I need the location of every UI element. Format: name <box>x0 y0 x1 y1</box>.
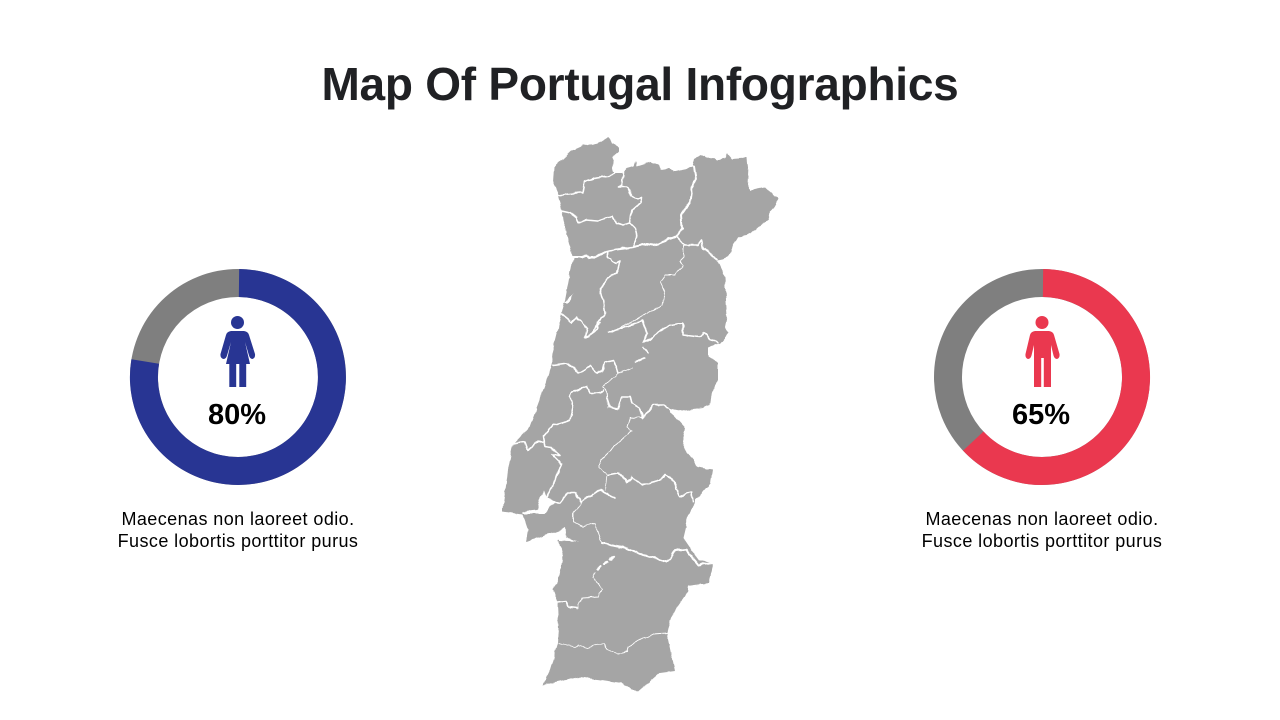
value: 80%: 80% <box>208 399 266 431</box>
title: Map Of Portugal Infographics <box>321 58 959 110</box>
estuary and coastal inlets <box>523 293 578 542</box>
caption right: Fusce lobortis porttitor purus <box>922 531 1162 551</box>
icon: woman <box>220 316 255 387</box>
icon: man <box>1025 316 1060 387</box>
donut chart: 80% <box>144 283 332 471</box>
map of Portugal <box>503 137 778 692</box>
value: 65%: 65% <box>1012 399 1070 431</box>
caption left: Fusce lobortis porttitor purus <box>118 531 358 551</box>
caption right: Maecenas non laoreet odio. <box>925 509 1159 529</box>
donut chart: 65% <box>948 283 1136 471</box>
caption left: Maecenas non laoreet odio. <box>121 509 355 529</box>
caption right <box>922 509 1162 551</box>
region borders <box>513 167 717 654</box>
caption left <box>118 509 358 551</box>
